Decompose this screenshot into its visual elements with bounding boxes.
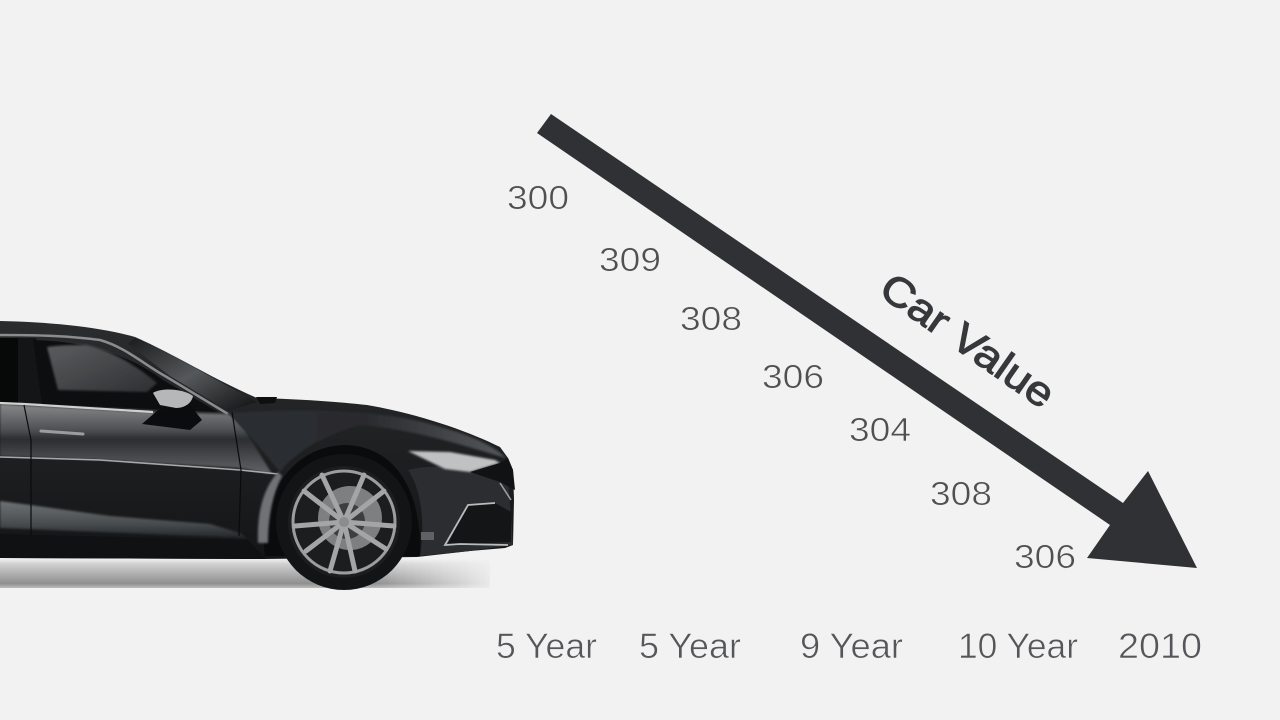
shoulder chrome line: [0, 403, 153, 412]
timeline labels: 2010: [1118, 627, 1202, 666]
grille chrome: [500, 483, 511, 500]
window pillar: [18, 338, 55, 403]
value labels: [507, 179, 1076, 575]
headlight: [408, 451, 500, 472]
hub: [339, 517, 349, 527]
arrow: declining car value: [537, 114, 1197, 568]
spokes: [295, 475, 394, 571]
intake chrome: [445, 503, 508, 545]
cowl: [256, 397, 277, 404]
wheel arch: [264, 445, 420, 556]
value labels: 300: [507, 179, 569, 216]
value labels: 308: [930, 475, 992, 512]
front wheel: [276, 454, 412, 590]
tire: [276, 454, 412, 590]
mirror: [142, 390, 202, 430]
rim: [293, 471, 395, 573]
arrow label: Car Value: Car Value: [872, 264, 1064, 417]
ground shadow: [0, 558, 490, 588]
timeline labels: 9 Year: [800, 627, 903, 666]
sill: [0, 534, 266, 559]
timeline labels: 10 Year: [958, 627, 1078, 666]
beltline reflection: [0, 457, 278, 474]
value labels: 308: [680, 300, 742, 337]
door seams: [24, 405, 241, 540]
timeline labels: [496, 627, 1202, 666]
car body: [0, 321, 514, 559]
bumper accent: [421, 532, 434, 540]
front side window: [33, 340, 218, 412]
brake disc: [318, 486, 382, 550]
lower intake: [447, 503, 511, 545]
grille tip: [470, 458, 515, 490]
timeline labels: 5 Year: [496, 627, 597, 666]
timeline labels: 5 Year: [639, 627, 741, 666]
value labels: 306: [1014, 538, 1076, 575]
rear side window: [0, 338, 18, 403]
roof trim: [0, 335, 228, 414]
value labels: 304: [849, 411, 911, 448]
value labels: 309: [599, 241, 661, 278]
value labels: 306: [762, 358, 824, 395]
front bumper: [408, 451, 515, 556]
windshield: [128, 338, 257, 411]
door handle: [41, 431, 83, 434]
arch lip: [258, 472, 282, 543]
lower door highlight: [0, 501, 247, 538]
hood surface: [228, 411, 506, 472]
car illustration: [0, 321, 515, 590]
shoulder band: [0, 404, 272, 474]
